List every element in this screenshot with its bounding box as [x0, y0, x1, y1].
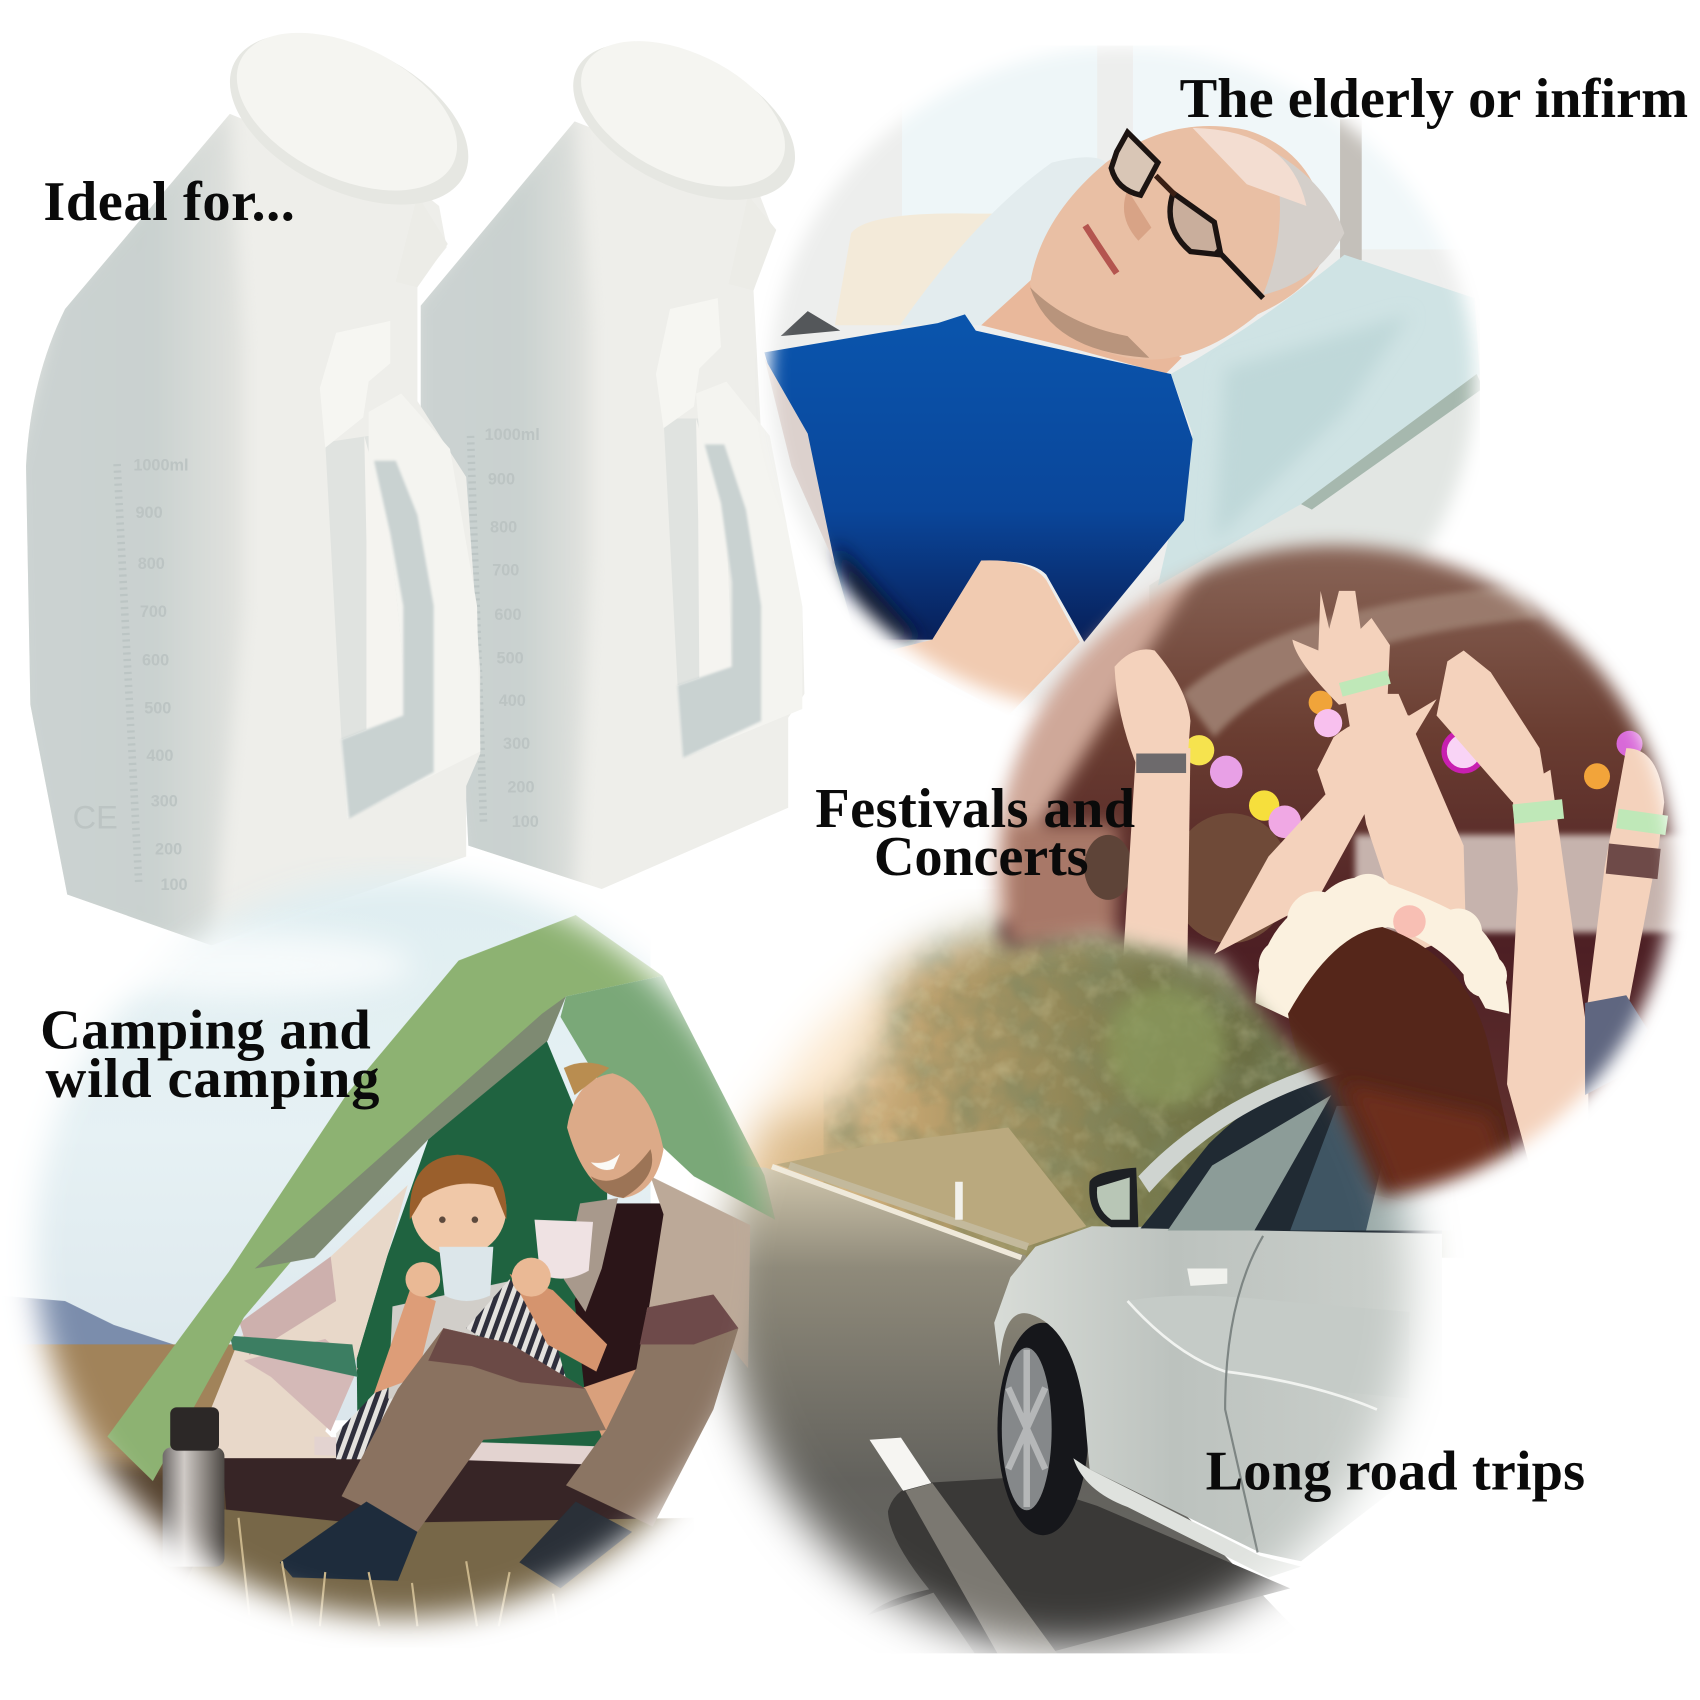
scale front: 300 — [151, 793, 178, 811]
hands — [405, 1258, 551, 1297]
handle rear — [656, 298, 802, 758]
bottle body front — [11, 98, 493, 965]
photo: elderly man in hospital bed — [764, 48, 1480, 710]
grass blades — [239, 1518, 558, 1626]
scale rear: 500 — [497, 650, 524, 668]
back pillow — [900, 157, 1106, 325]
car body — [994, 1226, 1442, 1561]
scale front: 200 — [155, 840, 182, 858]
label: festivals and concerts: Concerts — [874, 826, 1089, 888]
near trouser leg — [342, 1328, 606, 1532]
photo: festival crowd — [954, 520, 1700, 1236]
blanket edge — [764, 358, 835, 564]
product: urinal bottle, front — [26, 33, 480, 944]
road dash — [870, 1438, 931, 1491]
scale rear: 300 — [503, 735, 530, 753]
scale rear: 400 — [499, 692, 526, 710]
wristbands — [1136, 670, 1668, 879]
field — [0, 1344, 282, 1648]
arm — [889, 560, 1080, 716]
label: camping and wild camping: wild camping — [46, 1048, 379, 1110]
flower crown — [1255, 874, 1509, 1019]
man — [510, 1062, 750, 1527]
road — [710, 1168, 1280, 1654]
vacuum flask — [163, 1407, 224, 1567]
bottle body rear — [412, 108, 813, 900]
scale rear: 600 — [494, 606, 522, 624]
scale rear — [471, 426, 540, 831]
car windows — [1141, 1068, 1442, 1234]
scale front: 900 — [136, 504, 163, 522]
grass verge — [776, 1128, 1086, 1247]
raised arms — [1115, 591, 1664, 1182]
wheel — [997, 1323, 1089, 1535]
bed — [1150, 400, 1468, 592]
scale rear: 700 — [492, 562, 519, 580]
label: long road trips: Long road trips — [1206, 1441, 1585, 1503]
scale front: 500 — [144, 699, 171, 717]
marker post — [955, 1182, 963, 1220]
lid front — [203, 0, 495, 287]
label: camping and wild camping: Camping and — [40, 999, 371, 1061]
handle front — [320, 321, 480, 819]
plaid shirt — [1585, 995, 1648, 1095]
tent — [107, 915, 775, 1540]
room and window — [769, 48, 1462, 704]
main pillow — [1158, 255, 1480, 585]
socks — [280, 1502, 417, 1581]
scale rear: 100 — [512, 813, 539, 831]
label: festivals and concerts — [815, 778, 1135, 888]
groundsheet — [222, 1458, 651, 1540]
scale front: CE — [73, 799, 118, 835]
scale front: 700 — [140, 603, 167, 621]
car — [994, 1057, 1453, 1577]
bed rail — [1340, 119, 1362, 260]
blue t-shirt — [764, 314, 1193, 642]
car shadow — [867, 1478, 1290, 1653]
label: festivals and concerts: Festivals and — [815, 778, 1135, 840]
scale front — [73, 457, 188, 894]
crowd heads — [1171, 813, 1290, 943]
photo: father and son camping — [0, 857, 775, 1648]
boy — [336, 1155, 569, 1459]
tent canopy — [107, 915, 662, 1481]
sky — [0, 857, 651, 1420]
scale front: 400 — [146, 747, 173, 765]
hair — [1288, 927, 1518, 1203]
tent interior — [357, 1038, 607, 1458]
trees — [734, 898, 1444, 1258]
scale front: 800 — [138, 555, 165, 573]
grass foreground — [152, 1509, 694, 1648]
scale front: 600 — [142, 652, 169, 670]
label: the elderly or infirm: The elderly or infirm — [1180, 68, 1688, 130]
photo: car on a road trip — [704, 898, 1446, 1654]
cups — [439, 1220, 593, 1301]
scale rear: 200 — [507, 779, 535, 797]
scale front: 1000ml — [133, 457, 188, 475]
product: urinal bottle, rear — [420, 41, 804, 889]
tent inner fabric — [194, 1185, 408, 1464]
lid rear — [548, 11, 820, 291]
door strip — [255, 996, 566, 1268]
wing mirror — [1089, 1168, 1138, 1227]
stage background — [954, 520, 1700, 1236]
scale rear: 1000ml — [485, 426, 540, 444]
scale front: 100 — [160, 876, 188, 894]
heading: ideal for: Ideal for... — [43, 171, 295, 233]
stage lower — [1355, 835, 1700, 932]
label: camping and wild camping — [40, 999, 379, 1110]
scale rear: 800 — [490, 518, 517, 536]
stage lights — [1184, 691, 1643, 838]
mountains — [0, 1296, 173, 1350]
scale rear: 900 — [488, 471, 515, 489]
canopy right flap — [561, 976, 775, 1220]
man trousers — [566, 1295, 738, 1527]
head and neck — [981, 126, 1344, 374]
